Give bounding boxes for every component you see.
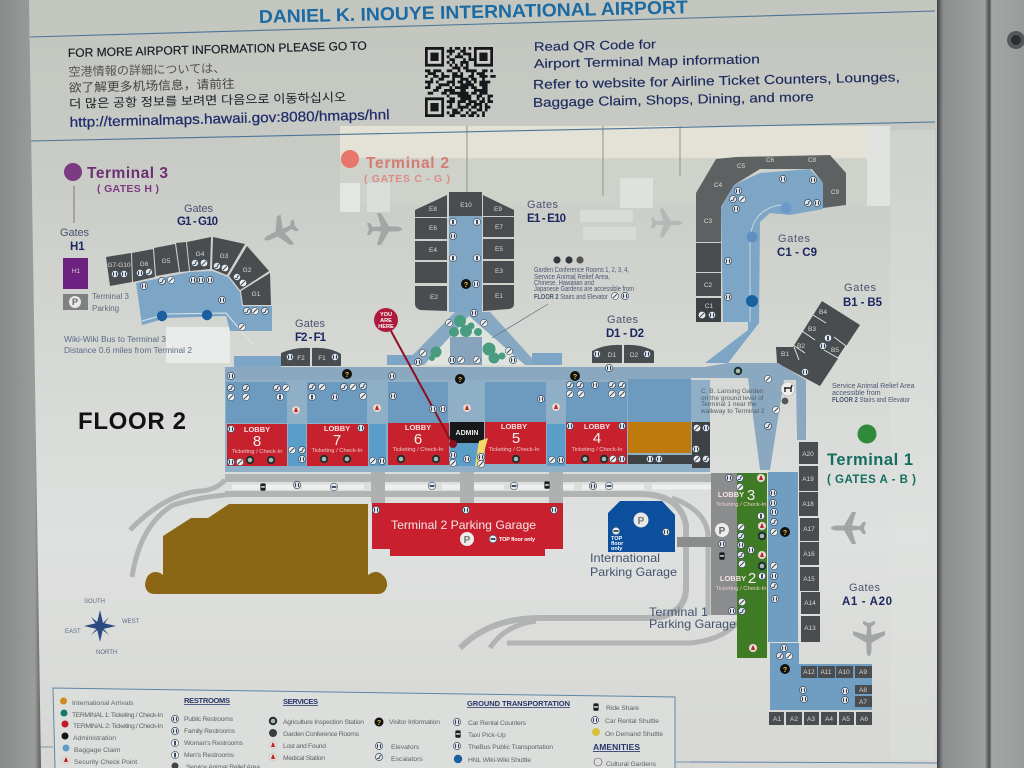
Floor 2 label: FLOOR 2 <box>78 408 186 435</box>
visitor information icons: ? <box>458 377 462 384</box>
admin: ADMIN <box>456 430 478 437</box>
legend: services: Medical Station <box>283 755 325 762</box>
visitor information icons: ? <box>573 374 577 381</box>
visitor information icons: ? <box>464 282 468 289</box>
screw detail <box>1011 35 1021 45</box>
international parking garage: only <box>611 546 623 552</box>
concourse E: E10 <box>460 202 472 209</box>
legend: restrooms: Public Restrooms <box>184 716 234 723</box>
header rules <box>30 11 935 141</box>
concourse C: C6 <box>766 157 775 164</box>
screw <box>1007 31 1024 49</box>
concourse E: E9 <box>494 206 502 213</box>
brown garage <box>145 504 387 594</box>
lobby 6 <box>388 423 449 465</box>
main terminal corridor <box>225 363 806 472</box>
legend: information and movement <box>374 718 440 763</box>
Gates E label: Gates <box>527 199 558 211</box>
legend: amenities: AMENITIES <box>593 742 640 752</box>
concourse B: B4 <box>819 309 827 316</box>
terminal 1 lobbies: LOBBY <box>718 490 744 499</box>
Terminal 1 label: ( GATES A - B ) <box>827 474 916 486</box>
Terminal 2 parking garage: P <box>464 535 471 546</box>
legend panel <box>40 688 690 768</box>
Terminal 3 label <box>64 163 168 223</box>
concourse G: G6 <box>140 261 149 268</box>
concourse E: E1 <box>495 293 503 300</box>
QR instructions: Refer to website for Airline Ticket Counters, Lounges, <box>533 69 900 92</box>
concourse G: G5 <box>162 258 171 265</box>
concourse B: B1 <box>781 351 789 358</box>
upper lobby cells <box>226 379 691 423</box>
legend: area colours: Administration <box>73 735 116 742</box>
terminal 1 lobbies: LOBBY <box>720 574 746 583</box>
legend: amenities <box>593 742 657 768</box>
compass: NORTH <box>96 650 117 656</box>
lobby 5 <box>485 422 546 464</box>
garden triangle <box>424 316 525 365</box>
multilingual info text: FOR MORE AIRPORT INFORMATION PLEASE GO TO <box>68 39 367 60</box>
concourse E: E8 <box>429 206 437 213</box>
legend: ground transportation: Taxi Pick-Up <box>468 732 506 739</box>
Wiki-Wiki note <box>64 335 193 355</box>
you are here pin: HERE <box>378 324 394 330</box>
Gates H1 <box>60 227 90 289</box>
Gates B label: B1 - B5 <box>843 297 883 309</box>
Gates F2 F1 <box>234 348 341 367</box>
concourse A: A10 <box>838 669 850 676</box>
QR instructions: Read QR Code for <box>534 37 656 54</box>
concourse G: G2 <box>243 267 252 274</box>
Terminal 3 parking: Terminal 3 <box>92 292 129 301</box>
lobby 7: 7 <box>333 432 341 449</box>
concourse A: A6 <box>860 716 868 723</box>
legend: information and movement: Visitor Information <box>389 719 440 726</box>
legend: information and movement: Escalators <box>391 756 423 763</box>
lobby 8: LOBBY <box>244 425 270 434</box>
concourse A <box>768 442 872 725</box>
lobby 4: LOBBY <box>584 422 610 431</box>
Terminal 3 parking <box>63 292 129 313</box>
international parking garage <box>608 501 675 552</box>
legend: ground transportation <box>453 699 663 764</box>
Gates C label: Gates <box>778 233 810 245</box>
concourse A: A11 <box>820 669 832 676</box>
multilingual info text <box>68 38 390 130</box>
lobby 8: Ticketing / Check-In <box>231 449 283 455</box>
international parking garage: TOP <box>611 536 623 542</box>
admin <box>450 422 484 443</box>
concourse G: G3 <box>220 253 229 260</box>
connector to T1 garage <box>677 537 711 547</box>
legend: restrooms: Family Restrooms <box>184 728 236 735</box>
concourse B <box>776 301 860 386</box>
Gates H1: H1 <box>70 241 85 253</box>
concourse G: G7-G10 <box>107 262 131 269</box>
Gates D1 D2: D1 <box>608 352 617 359</box>
airplane icons <box>258 209 885 656</box>
concourse E center block <box>450 337 482 365</box>
concourse C: C1 <box>705 303 714 310</box>
lobby 8: 8 <box>253 433 261 450</box>
terminal 1 garage label: Parking Garage <box>649 617 736 631</box>
multilingual info text: 欲了解更多机场信息，请前往 <box>69 76 235 95</box>
legend: ground transportation: GROUND TRANSPORTATION <box>467 699 570 708</box>
Gates H1: Gates <box>60 227 90 239</box>
Gates F2 F1: F2 <box>297 355 305 362</box>
service animal note <box>781 382 915 404</box>
Gates D label: D1 - D2 <box>606 328 644 340</box>
garden note: Garden Conference Rooms 1, 2, 3, 4, <box>534 267 629 274</box>
terminal 1 garage label <box>649 605 736 631</box>
C. B. Lansing note: Terminal 1 near the <box>701 401 757 408</box>
concourse E: E2 <box>430 294 438 301</box>
lobby 7 <box>307 424 368 466</box>
legend: services <box>269 697 364 762</box>
Gates A label: Gates <box>849 582 880 594</box>
legend: services: Lost and Found <box>283 743 326 750</box>
service animal note: accessible from <box>832 390 881 397</box>
compass: EAST <box>65 629 81 635</box>
concourse A: A14 <box>804 600 816 607</box>
Gates B label <box>843 282 883 309</box>
C. B. Lansing note: walkway to Terminal 2 <box>700 408 765 415</box>
international arrivals block <box>628 422 691 453</box>
concourse A: A19 <box>802 476 814 483</box>
concourse A: A13 <box>804 625 816 632</box>
legend: services: Garden Conference Rooms <box>283 731 360 738</box>
concourse E: E4 <box>429 247 437 254</box>
lobby 5: Ticketing / Check-In <box>488 447 540 453</box>
concourse A: A5 <box>842 716 850 723</box>
terminal 1 garage label: Terminal 1 <box>649 605 708 619</box>
concourse E <box>415 192 514 312</box>
visitor information icons: ? <box>783 530 787 537</box>
legend: area colours: TERMINAL 1: Ticketing / Check-In <box>72 712 163 719</box>
concourse E walkways <box>403 312 538 365</box>
concourse E: E6 <box>429 225 437 232</box>
Terminal 2 label: Terminal 2 <box>366 155 449 172</box>
Gates F label <box>295 318 327 344</box>
Gates C label <box>777 233 817 259</box>
C. B. Lansing note <box>700 388 765 415</box>
multilingual info text: 空港情報の詳細については、 <box>68 60 225 79</box>
dark service strip <box>628 422 710 468</box>
concourse A: A20 <box>802 451 814 458</box>
lobby 8 <box>227 424 287 466</box>
bottom rule <box>690 762 938 763</box>
legend: information and movement: ? <box>377 720 381 727</box>
lobby 7: LOBBY <box>324 424 350 433</box>
lobby 6: LOBBY <box>405 423 431 432</box>
Gates A label <box>842 582 892 608</box>
service animal note: Service Animal Relief Area <box>832 383 915 390</box>
terminal 1 lobbies: Ticketing / Check-In <box>715 586 767 592</box>
Gates D1 D2: D2 <box>630 352 639 359</box>
concourse A: A15 <box>803 576 815 583</box>
concourse B: B2 <box>797 343 805 350</box>
lobby 6: 6 <box>414 431 422 448</box>
international garage label <box>590 551 677 579</box>
Gates E label: E1 - E10 <box>527 213 566 225</box>
side walkways <box>387 353 562 365</box>
concourse C: C9 <box>831 189 840 196</box>
terminal 1 lobbies: 2 <box>748 570 756 587</box>
Gates C label: C1 - C9 <box>777 247 817 259</box>
concourse A: A12 <box>803 669 815 676</box>
concourse C: C5 <box>737 163 746 170</box>
concourse C: C8 <box>808 157 817 164</box>
concourse A: A3 <box>807 716 815 723</box>
Gates D label: Gates <box>607 314 638 326</box>
visitor information icons: ? <box>783 667 787 674</box>
legend: ground transportation: Car Rental Counters <box>468 720 527 727</box>
concourse A: A4 <box>825 716 833 723</box>
legend: ground transportation: On Demand Shuttle <box>605 731 663 738</box>
concourse C <box>696 155 846 363</box>
Wiki-Wiki note: Distance 0.6 miles from Terminal 2 <box>64 346 193 355</box>
Terminal 3 label: ( GATES H ) <box>97 183 159 195</box>
Terminal 1 label <box>827 424 916 486</box>
legend: information and movement: Elevators <box>391 744 420 751</box>
garden note: Service Animal Relief Area, <box>534 274 610 281</box>
concourse E: E7 <box>495 224 503 231</box>
legend: ground transportation: HNL Wiki-Wiki Shuttle <box>468 757 531 764</box>
Terminal 1 label: Terminal 1 <box>827 451 913 469</box>
concourse C: C2 <box>704 282 713 289</box>
international garage label: Parking Garage <box>590 565 677 579</box>
international parking garage: P <box>638 516 645 527</box>
multilingual info text: http://terminalmaps.hawaii.gov:8080/hmaps/hnl <box>69 106 390 130</box>
QR code <box>425 47 496 117</box>
Gates F label: Gates <box>295 318 326 330</box>
international garage label: International <box>590 551 660 565</box>
garden note <box>492 256 634 338</box>
Gates B label: Gates <box>844 282 876 294</box>
international parking garage: floor <box>611 541 624 547</box>
multilingual info text: 더 많은 공항 정보를 보려면 다음으로 이동하십시오 <box>69 90 346 111</box>
legend: restrooms <box>171 696 260 768</box>
Terminal 3 label: Terminal 3 <box>87 165 168 182</box>
QR instructions: Baggage Claim, Shops, Dining, and more <box>533 89 814 110</box>
Terminal 2 parking garage: TOP floor only <box>499 537 536 543</box>
service icons <box>111 175 849 704</box>
Gates D label <box>606 314 644 340</box>
glare <box>475 438 488 466</box>
you are here pin: ARE <box>380 318 392 324</box>
Gates A label: A1 - A20 <box>842 596 892 608</box>
concourse A: A1 <box>773 716 781 723</box>
roads <box>130 470 738 648</box>
lobby 5: LOBBY <box>501 422 527 431</box>
lobby 6: Ticketing / Check-In <box>392 447 444 453</box>
Terminal 2 parking garage: Terminal 2 Parking Garage <box>391 518 536 532</box>
legend: ground transportation: Ride Share <box>606 705 639 712</box>
legend: services: Agriculture Inspection Station <box>283 719 364 726</box>
concourse G: G1 <box>252 291 261 298</box>
concourse A: A2 <box>790 716 798 723</box>
left metal frame <box>0 0 41 768</box>
legend: restrooms: RESTROOMS <box>184 696 230 705</box>
concourse A: A7 <box>859 699 867 706</box>
you are here pin: YOU <box>380 312 392 318</box>
gardens <box>429 315 506 364</box>
lobby 4: 4 <box>593 430 601 447</box>
Gates F2 F1: F1 <box>318 355 326 362</box>
Terminal 2 parking garage <box>372 503 563 556</box>
lobby 5: 5 <box>512 430 520 447</box>
garden note: Chinese, Hawaiian and <box>534 280 594 287</box>
QR instructions <box>533 37 900 110</box>
legend: restrooms: Woman's Restrooms <box>184 740 244 747</box>
terminal 1 lobbies: Ticketing / Check-In <box>715 502 767 508</box>
legend: ground transportation: Car Rental Shuttle <box>605 718 659 725</box>
Gates G label <box>177 203 218 228</box>
concourse A: A18 <box>802 501 814 508</box>
terminal 1 lobbies: P <box>719 526 726 537</box>
legend: area colours <box>60 698 163 766</box>
Terminal 3 parking: Parking <box>92 304 119 313</box>
legend: area colours: International Arrivals <box>72 700 134 707</box>
garden note: FLOOR 2 Stairs and Elevator <box>534 294 609 301</box>
concourse B: B5 <box>831 347 839 354</box>
concourse A: A8 <box>859 687 867 694</box>
legend: area colours: TERMINAL 2: Ticketing / Check-In <box>73 723 163 730</box>
window reflection <box>166 126 935 760</box>
terminal 1 lobbies: 3 <box>747 487 755 504</box>
Terminal 2 label <box>341 150 450 185</box>
Terminal 3 parking: P <box>72 297 78 307</box>
legend: ground transportation: TheBus Public Transportation <box>468 744 553 751</box>
terminal 1 lobbies <box>711 473 767 658</box>
visitor information icons: ? <box>345 372 349 379</box>
Gates G label: G1 - G10 <box>177 216 218 228</box>
legend: restrooms: Men's Restrooms <box>184 752 235 759</box>
garden note: Japanese Gardens are accessible from <box>534 286 634 293</box>
concourse C: C4 <box>714 182 723 189</box>
concourse G: G4 <box>196 251 205 258</box>
Gates D1 D2 <box>592 345 654 363</box>
lower column cells <box>288 424 565 466</box>
Gates G label: Gates <box>184 203 214 215</box>
Gates E label <box>527 199 566 225</box>
QR instructions: Airport Terminal Map information <box>534 52 760 71</box>
concourse B: B3 <box>808 326 816 333</box>
legend: amenities: Cultural Gardens <box>606 761 657 768</box>
compass: SOUTH <box>84 599 105 605</box>
Terminal 2 label: ( GATES C - G ) <box>364 173 450 185</box>
Gates F label: F2 - F1 <box>295 332 327 344</box>
concourse A: A9 <box>859 669 867 676</box>
concourse A: A16 <box>803 551 815 558</box>
Wiki-Wiki note: Wiki-Wiki Bus to Terminal 3 <box>64 335 167 344</box>
legend: services: SERVICES <box>283 697 318 706</box>
concourse G <box>106 237 272 345</box>
right metal frame <box>937 0 1024 768</box>
legend: area colours: Security Check Point <box>74 759 137 766</box>
legend: area colours: Baggage Claim <box>74 747 121 754</box>
C. B. Lansing note: C. B. Lansing Garden <box>701 388 764 395</box>
visitor information icons <box>342 279 790 674</box>
lobby 4 <box>566 422 627 464</box>
service animal note: FLOOR 2 Stairs and Elevator <box>832 397 911 404</box>
concourse E: E3 <box>495 268 503 275</box>
concourse A: A17 <box>803 526 815 533</box>
compass <box>65 599 140 656</box>
compass: WEST <box>122 619 140 625</box>
you are here pin <box>374 308 457 448</box>
lobby 4: Ticketing / Check-In <box>571 447 623 453</box>
lobby 7: Ticketing / Check-In <box>311 448 363 454</box>
C. B. Lansing note: on the ground level of <box>701 395 764 402</box>
concourse C: C3 <box>704 218 713 225</box>
Gates H1: H1 <box>72 268 81 275</box>
concourse E: E5 <box>495 246 503 253</box>
